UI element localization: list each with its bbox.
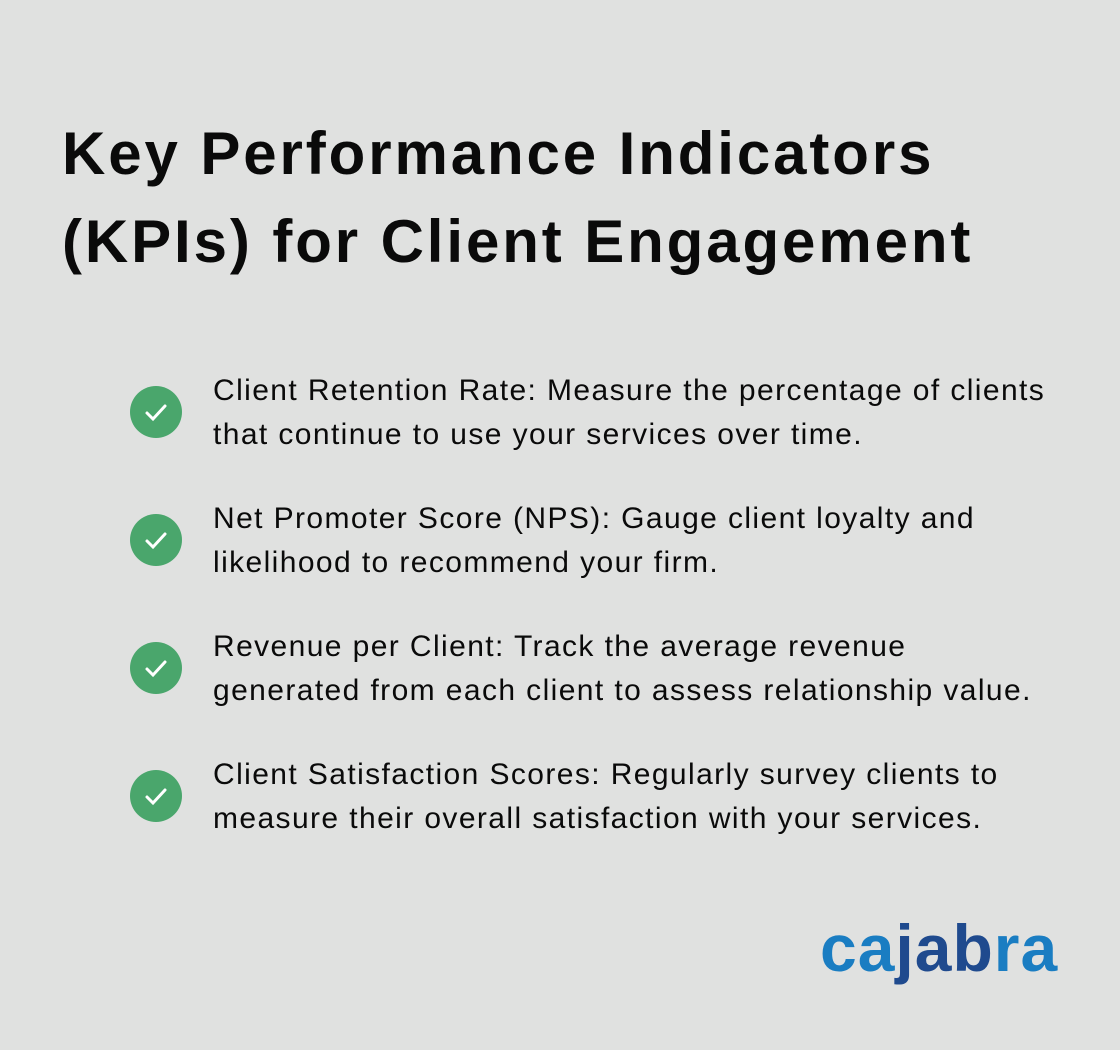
- title: (KPIs) for Client Engagement: [62, 208, 973, 275]
- title: Key Performance Indicators: [62, 120, 934, 187]
- item: retention: [130, 374, 1045, 451]
- text: satisfaction: [213, 758, 999, 835]
- text: revenue: Revenue per Client: Track the average revenue: [213, 630, 906, 663]
- item: revenue: [130, 630, 1032, 707]
- title: [62, 120, 973, 275]
- item: nps: [130, 502, 975, 579]
- item: satisfaction: [130, 758, 999, 835]
- icon: check: [130, 514, 182, 566]
- text: nps: likelihood to recommend your firm.: [213, 546, 719, 579]
- text: nps: Net Promoter Score (NPS): Gauge client loyalty and: [213, 502, 975, 535]
- icon: check: [130, 386, 182, 438]
- text: satisfaction: Client Satisfaction Scores: Regularly survey clients to: [213, 758, 999, 791]
- text: retention: that continue to use your services over time.: [213, 418, 863, 451]
- icon: check: [130, 642, 182, 694]
- text: nps: [213, 502, 975, 579]
- text: revenue: generated from each client to assess relationship value.: [213, 674, 1032, 707]
- text: revenue: [213, 630, 1032, 707]
- text: retention: [213, 374, 1045, 451]
- logo: cajabra: [820, 911, 1058, 985]
- text: satisfaction: measure their overall satisfaction with your services.: [213, 802, 982, 835]
- icon: check: [130, 770, 182, 822]
- text: retention: Client Retention Rate: Measure the percentage of clients: [213, 374, 1045, 407]
